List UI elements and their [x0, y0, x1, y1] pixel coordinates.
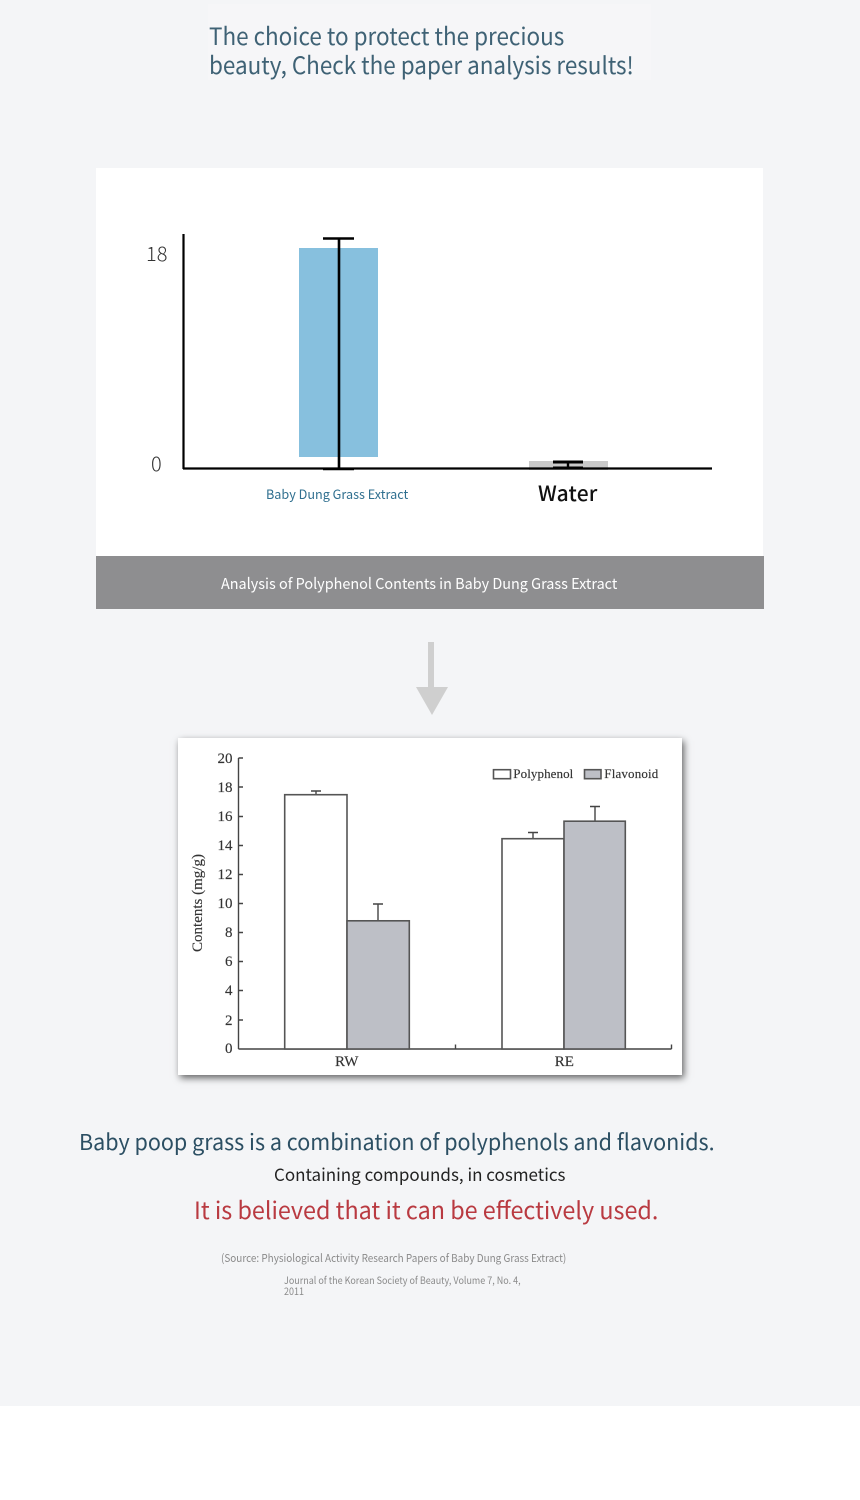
bar chart: polyphenol and flavonoid contents: 12 [218, 867, 232, 883]
bar chart: polyphenol and flavonoid contents: RE [555, 1054, 574, 1070]
journal reference [284, 1272, 521, 1298]
bar chart: polyphenol and flavonoid contents: 16 [218, 809, 233, 825]
conclusion line 2: Containing compounds, in cosmetics [274, 1161, 566, 1186]
caption text: Analysis of Polyphenol Contents in Baby Dung Grass Extract [221, 573, 617, 594]
title: The choice to protect the precious [209, 17, 564, 52]
category label: extract: Baby Dung Grass Extract [266, 484, 408, 503]
bar chart: polyphenol and flavonoid contents: Contents (mg/g) [190, 854, 206, 952]
bar chart: extract vs water [182, 234, 712, 470]
conclusion line 1: Baby poop grass is a combination of polyphenols and flavonids. [79, 1125, 715, 1157]
bar chart: polyphenol and flavonoid contents: RW [335, 1054, 359, 1070]
bar chart: polyphenol and flavonoid contents: 2 [225, 1013, 232, 1029]
axis label: 18: 18 [146, 238, 167, 267]
title [209, 17, 634, 81]
bar chart: polyphenol and flavonoid contents [190, 751, 672, 1070]
journal reference: 2011 [284, 1283, 304, 1298]
arrow: down [416, 642, 448, 715]
bar chart: polyphenol and flavonoid contents: 14 [218, 838, 233, 854]
journal reference: Journal of the Korean Society of Beauty, Volume 7, No. 4, [284, 1272, 521, 1287]
panel: paper chart image [178, 738, 682, 1075]
bar chart: polyphenol and flavonoid contents: 0 [225, 1041, 232, 1057]
category label: water: Water [538, 478, 598, 508]
axis label: 0: 0 [151, 448, 162, 477]
bar chart: polyphenol and flavonoid contents: Flavonoid [604, 766, 659, 781]
bar chart: polyphenol and flavonoid contents: Polyphenol [513, 766, 574, 781]
bar chart: polyphenol and flavonoid contents: 6 [225, 954, 233, 970]
conclusion text [79, 1125, 715, 1298]
source line: (Source: Physiological Activity Research Papers of Baby Dung Grass Extract) [221, 1250, 566, 1266]
bar chart: polyphenol and flavonoid contents: 8 [225, 925, 232, 941]
bar chart: polyphenol and flavonoid contents: 4 [225, 983, 233, 999]
panel: polyphenol analysis chart [96, 168, 764, 609]
chart background [96, 168, 763, 556]
bar chart: polyphenol and flavonoid contents: 20 [218, 751, 232, 767]
bar chart: polyphenol and flavonoid contents: 18 [218, 780, 232, 796]
title: beauty, Check the paper analysis results! [209, 46, 634, 81]
conclusion line 3: It is believed that it can be effectively used. [194, 1191, 658, 1226]
caption band [96, 556, 764, 609]
bar chart: polyphenol and flavonoid contents: 10 [218, 896, 232, 912]
